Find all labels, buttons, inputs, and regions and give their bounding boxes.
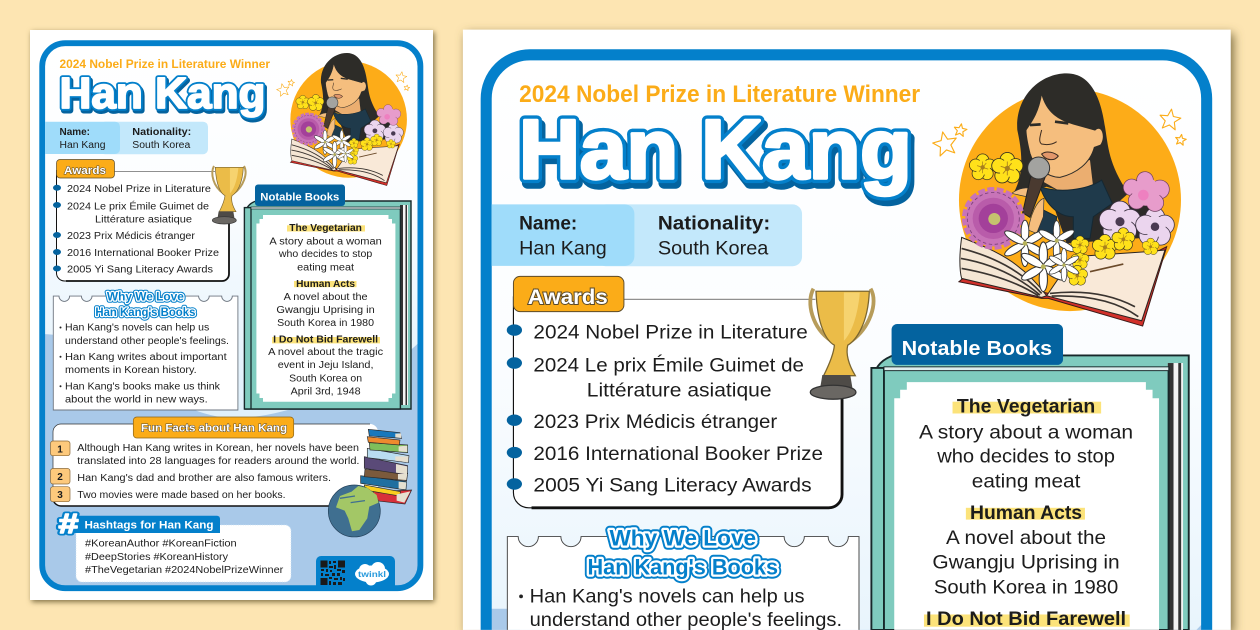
notable books panel [244, 184, 411, 409]
icon: trophy [212, 166, 246, 224]
facts text: Although Han Kang writes in Korean, her novels have been [77, 443, 359, 454]
reasons list: about the world in new ways. [65, 394, 208, 406]
number tabs [50, 441, 70, 502]
awards list: 2016 International Booker Prize [533, 444, 823, 465]
why we love heading: Han Kang's Books [95, 306, 195, 319]
reasons list: understand other people's feelings. [65, 336, 229, 347]
title: Han Kang [519, 102, 912, 196]
hashtags text [85, 539, 284, 576]
book list: who decides to stop [936, 446, 1115, 467]
icon: globe [328, 485, 380, 537]
why we love heading: Why We Love [609, 525, 756, 550]
why we love heading: Why We Love [107, 291, 184, 304]
icon: trophy [810, 289, 874, 399]
why we love heading: Why We Love [609, 525, 756, 550]
hashtags text: #KoreanAuthor #KoreanFiction [85, 539, 237, 550]
book list: A story about a woman [919, 422, 1133, 443]
notable books tab [255, 184, 345, 206]
book list: Human Acts [296, 279, 355, 290]
why we love heading: Han Kang's Books [588, 554, 778, 579]
number tabs: 1 [57, 444, 63, 456]
hashtags tab [72, 516, 220, 533]
large poster close-up [463, 30, 1231, 630]
poster background panel [492, 60, 1202, 630]
awards list: 2024 Le prix Émile Guimet de [67, 200, 209, 212]
book list: I Do Not Bid Farewell [273, 335, 378, 346]
book frame [871, 355, 1189, 630]
awards list: 2005 Yi Sang Literacy Awards [67, 264, 213, 276]
name and nationality band: Han Kang [60, 140, 106, 151]
notable books tab: Notable Books [902, 338, 1052, 360]
awards list [507, 322, 823, 497]
awards list: 2023 Prix Médicis étranger [67, 231, 196, 242]
title: Han Kang [519, 102, 912, 196]
book list: April 3rd, 1948 [291, 386, 361, 398]
book list: I Do Not Bid Farewell [926, 609, 1126, 630]
number tabs: 3 [57, 490, 63, 501]
why we love heading [95, 291, 195, 319]
awards list: Littérature asiatique [587, 380, 772, 401]
book list: The Vegetarian [289, 223, 362, 234]
why we love heading: Han Kang's Books [588, 554, 778, 579]
reasons list: Han Kang writes about important [65, 352, 227, 363]
subtitle: 2024 Nobel Prize in Literature Winner [60, 57, 270, 71]
awards list: 2024 Le prix Émile Guimet de [533, 356, 804, 377]
book list: A novel about the [946, 528, 1106, 549]
name and nationality band: Name: [60, 127, 90, 138]
icon: hash symbol: # [58, 508, 79, 539]
reasons list: moments in Korean history. [65, 365, 197, 376]
hashtags tab: Hashtags for Han Kang [84, 519, 214, 531]
fun facts heading: Fun Facts about Han Kang [141, 422, 287, 434]
fun facts panel [50, 417, 378, 506]
title: Han Kang [60, 69, 266, 118]
poster background panel [45, 232, 418, 586]
book list: eating meat [972, 471, 1081, 492]
book list: eating meat [297, 262, 354, 273]
why we love heading: Han Kang's Books [588, 554, 778, 579]
hashtags panel [58, 508, 291, 582]
book list: event in Jeju Island, [278, 360, 373, 371]
awards list [53, 184, 219, 276]
name and nationality band: South Korea [658, 238, 769, 259]
name and nationality band: Name: [519, 214, 577, 235]
facts text: Two movies were made based on her books. [77, 490, 286, 501]
reasons list [519, 586, 842, 630]
awards list: 2023 Prix Médicis étranger [533, 412, 778, 433]
why we love heading: Han Kang's Books [95, 306, 195, 319]
notable books tab [892, 324, 1063, 365]
name and nationality band [492, 204, 802, 266]
awards panel [507, 276, 842, 508]
awards list: 2024 Nobel Prize in Literature [67, 184, 211, 195]
hashtags text: #DeepStories #KoreanHistory [85, 552, 228, 563]
book list: South Korea in 1980 [934, 578, 1118, 599]
logo box with QR code and twinkl cloud: twinkl [358, 569, 386, 579]
title: Han Kang [522, 107, 914, 201]
book list: South Korea on [289, 374, 362, 384]
hashtags text: #TheVegetarian #2024NobelPrizeWinner [85, 565, 284, 576]
why we love panel [507, 525, 859, 630]
why we love heading: Why We Love [609, 525, 756, 550]
subtitle: 2024 Nobel Prize in Literature Winner [519, 82, 920, 108]
reasons list [60, 323, 229, 406]
facts text [77, 443, 360, 501]
paper sheet [30, 30, 433, 600]
awards list: 2005 Yi Sang Literacy Awards [533, 476, 812, 497]
awards list: Littérature asiatique [95, 214, 192, 226]
name and nationality band: South Korea [132, 140, 191, 151]
why we love heading [588, 525, 778, 579]
paper sheet [463, 30, 1231, 630]
portrait illustration [931, 73, 1187, 326]
facts text: translated into 28 languages for readers around the world. [77, 456, 360, 467]
fun facts heading [133, 417, 294, 438]
reasons list: Han Kang's novels can help us [65, 323, 209, 334]
awards list: 2016 International Booker Prize [67, 248, 219, 259]
book list: The Vegetarian [957, 397, 1095, 418]
title: Han Kang [60, 69, 266, 118]
why we love panel [53, 291, 238, 410]
name and nationality band [45, 122, 208, 154]
why we love heading: Han Kang's Books [95, 306, 195, 319]
title: Han Kang [61, 72, 267, 120]
book list: A story about a woman [269, 237, 382, 248]
small poster preview [30, 30, 433, 600]
icon: hash symbol: # [58, 508, 79, 539]
reasons list: Han Kang's novels can help us [530, 586, 805, 607]
logo box with QR code and twinkl cloud [316, 556, 395, 590]
name and nationality band: Han Kang [519, 238, 607, 259]
number tabs: 2 [57, 472, 63, 483]
portrait illustration [276, 53, 410, 186]
awards tab: Awards [528, 286, 608, 309]
awards tab [56, 160, 114, 178]
reasons list: Han Kang's books make us think [65, 382, 221, 392]
icon: stack of books [361, 429, 412, 504]
awards tab [513, 276, 624, 312]
name and nationality band: Nationality: [658, 214, 770, 235]
book list [268, 223, 383, 398]
book list: A novel about the tragic [268, 347, 383, 358]
poster frame [486, 55, 1207, 630]
book list: Gwangju Uprising in [932, 552, 1120, 573]
book list: Gwangju Uprising in [276, 305, 375, 316]
book list: who decides to stop [278, 249, 373, 260]
awards list: 2024 Nobel Prize in Literature [533, 322, 808, 343]
awards panel [53, 160, 229, 281]
awards tab: Awards [64, 165, 106, 177]
book list: South Korea in 1980 [277, 318, 374, 329]
book list: Human Acts [970, 503, 1082, 524]
notable books tab: Notable Books [260, 192, 339, 204]
why we love heading: Why We Love [107, 291, 184, 304]
book list: A novel about the [284, 292, 368, 303]
book list [919, 397, 1133, 630]
notable books panel [871, 324, 1189, 630]
name and nationality band: Nationality: [132, 127, 191, 138]
poster frame [42, 43, 420, 588]
why we love heading: Why We Love [107, 291, 184, 304]
facts text: Han Kang's dad and brother are also famous writers. [77, 473, 331, 484]
